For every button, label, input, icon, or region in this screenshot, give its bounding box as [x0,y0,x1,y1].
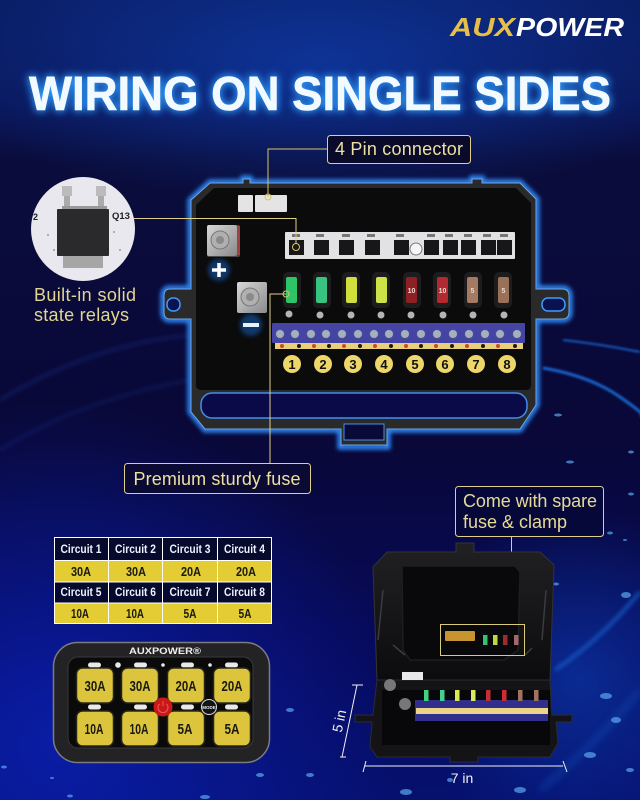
logo: AUX [449,12,517,42]
inserted fuses [424,690,538,701]
fuses: 10 [408,288,415,295]
callout: 4 pin connector: 4 Pin connector [335,139,463,159]
callout: built-in solid state relays [31,177,300,325]
open enclosure photo [355,543,572,762]
spare fuses [483,635,518,645]
table: circuit ratings: Circuit 2 [115,544,156,556]
left ear hole [167,298,180,311]
table: circuit ratings: Circuit 5 [60,587,102,599]
bottom clip [344,424,384,440]
callout: premium sturdy fuse: Premium sturdy fuse [134,469,300,489]
relay close-up [31,177,135,281]
callout: built-in solid state relays: Built-in solid [34,285,136,305]
control panel: 5A [224,722,240,738]
circuit numbers: 1 [288,357,296,372]
control panel: 30A [130,679,151,695]
callout: spare fuse and clamp: Come with spare [463,491,597,511]
spare clamp [445,631,475,641]
circuit numbers: 3 [349,357,357,372]
table: circuit ratings: Circuit 4 [224,544,266,556]
logo: POWER [516,12,624,42]
table: circuit ratings: Circuit 8 [224,587,266,599]
main fuse box [163,178,570,447]
table: circuit ratings: 5A [184,607,196,621]
terminal strip [415,700,548,721]
dimension: 5 in: 5 in [329,708,349,734]
relay close-up: Q13 [112,211,130,222]
right ear hole [542,298,565,311]
table: circuit ratings: Circuit 3 [170,544,210,556]
callout: spare fuse and clamp [456,486,604,624]
relay strip [285,232,515,259]
dimension: 7 in: 7 in [451,770,473,786]
table: circuit ratings: Circuit 6 [115,587,156,599]
white connectors [238,195,287,212]
mounting slot [201,393,527,418]
control panel: 5A [178,722,193,738]
control panel: 20A [222,679,243,695]
circuit numbers: 2 [319,357,327,372]
fuses [283,272,512,318]
lid [373,543,554,680]
control panel: 10A [130,722,149,738]
mode button [202,700,216,714]
table: circuit ratings: 20A [181,565,201,579]
title: WIRING ON SINGLE SIDES [29,68,611,121]
table: circuit ratings: Circuit 7 [170,587,210,599]
circuit numbers: 7 [472,357,480,372]
table: circuit ratings: 10A [126,607,144,621]
table: circuit ratings: 10A [71,607,89,621]
logo [449,12,624,42]
mode button: MODE [202,705,216,710]
control panel: 10A [84,722,104,738]
control panel: 30A [84,679,106,695]
control panel: 20A [176,679,197,695]
terminal block [272,323,525,349]
circuit numbers: 6 [441,357,449,372]
plus sign [208,259,230,281]
table: circuit ratings: 30A [71,565,91,579]
table: circuit ratings: 30A [126,565,146,579]
minus sign [240,314,262,336]
fuses: 5 [471,288,475,295]
circuit numbers: 8 [503,357,511,372]
terminal negative [237,282,267,313]
dimension: 5 in [329,685,363,757]
callout: built-in solid state relays: state relays [34,305,129,325]
circuit numbers: 5 [411,357,419,372]
terminal positive [207,225,240,257]
callout: 4 pin connector [265,136,470,200]
control panel: AUXPOWER® [129,646,201,657]
base [355,680,572,762]
white connector [402,672,423,680]
relay close-up: 2 [33,212,38,222]
fuses: 5 [502,288,506,295]
fuses: 10 [439,288,446,295]
posts [384,679,411,710]
callout: spare fuse and clamp: fuse & clamp [463,512,567,532]
table: circuit ratings [54,537,272,624]
circuit numbers: 4 [380,357,388,372]
control panel [54,642,270,762]
table: circuit ratings: 5A [238,607,252,621]
circuit numbers [283,355,516,373]
table: circuit ratings: Circuit 1 [60,544,102,556]
power button [154,698,172,716]
callout: premium sturdy fuse [124,291,310,494]
title: WIRING ON SINGLE SIDES [29,68,611,121]
table: circuit ratings: 20A [236,565,256,579]
highlight frame [440,624,524,656]
dimension: 7 in [363,761,567,786]
